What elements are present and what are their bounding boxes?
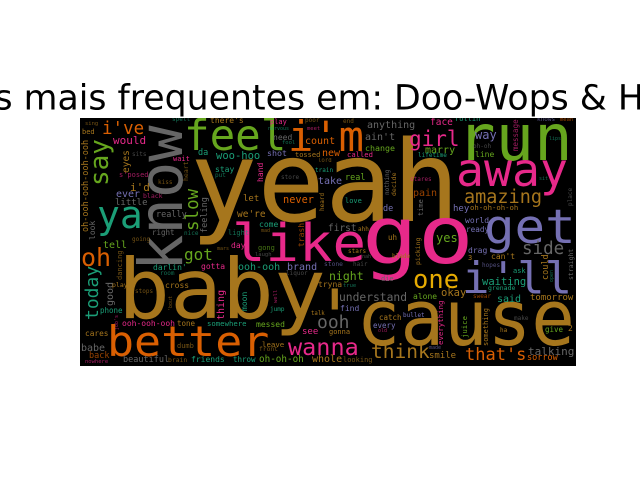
small words: night xyxy=(329,269,364,283)
word: 'cause: 'cause xyxy=(313,273,575,364)
small words: heard xyxy=(319,193,326,211)
small words: front xyxy=(259,346,278,353)
small words: bullet xyxy=(403,312,425,319)
small words: ooh-ooh xyxy=(238,262,280,273)
word: girl: girl xyxy=(409,127,460,151)
small words: bed xyxy=(82,128,95,136)
word: like: like xyxy=(232,213,366,274)
small words: place xyxy=(567,188,574,206)
small words: cross xyxy=(165,281,189,290)
small words: oh-oh xyxy=(473,143,491,150)
small words: heart xyxy=(182,161,190,181)
small words: tomorrow xyxy=(530,293,574,303)
word: baby: baby xyxy=(118,241,326,338)
small words: open xyxy=(549,270,555,282)
small words: tryna xyxy=(318,280,342,289)
small words: world xyxy=(465,216,489,225)
small words: back xyxy=(89,351,109,361)
small words: come xyxy=(259,220,278,229)
word: i'll: i'll xyxy=(462,252,572,304)
small words: beautiful xyxy=(123,355,169,365)
small words: drag xyxy=(468,246,487,255)
small words: s'posed xyxy=(119,171,149,179)
small words: marry xyxy=(425,145,455,156)
word: that's: that's xyxy=(465,345,526,365)
small words: tell xyxy=(103,240,127,251)
small words: change xyxy=(365,143,395,153)
panel: word cloud xyxy=(80,102,576,367)
small words: decide xyxy=(390,172,398,196)
small words: nice xyxy=(184,230,199,237)
word: think: think xyxy=(371,340,430,363)
small words: make xyxy=(514,315,529,322)
word: away: away xyxy=(456,143,568,197)
word: say: say xyxy=(85,139,115,186)
small words: stares xyxy=(410,176,432,183)
small words: da xyxy=(198,148,208,158)
word: get: get xyxy=(484,200,576,255)
word: feel: feel xyxy=(184,112,286,161)
small words: made xyxy=(429,345,441,351)
small words: light xyxy=(228,229,249,237)
small words: looking xyxy=(343,356,373,364)
small words: dancing xyxy=(116,250,124,280)
small words: 2 xyxy=(568,324,573,333)
small words: oh-oh-oh xyxy=(259,354,304,365)
small words: throw xyxy=(233,355,256,364)
small words: leave xyxy=(262,340,285,349)
word: better: better xyxy=(107,318,269,367)
small words: take xyxy=(318,176,342,187)
small words: give xyxy=(545,325,564,334)
small words: mars xyxy=(217,246,229,252)
small words: somewhere xyxy=(207,319,247,328)
small words: play xyxy=(270,118,287,126)
small words: way xyxy=(475,128,497,142)
small words: waiting xyxy=(482,276,526,288)
small words: gong xyxy=(258,244,275,252)
small words: fool xyxy=(282,140,295,146)
small words xyxy=(81,115,575,365)
small words: good xyxy=(105,282,116,306)
small words: whole xyxy=(312,354,342,365)
small words: i'd xyxy=(130,181,150,194)
small words: sing xyxy=(85,121,98,127)
small words: love xyxy=(345,197,362,205)
small words: uh xyxy=(388,233,397,242)
small words: tone xyxy=(177,319,196,328)
small words: spell xyxy=(172,116,190,123)
small words: catch xyxy=(379,313,402,322)
small words: something xyxy=(482,308,490,346)
small words: kiss xyxy=(158,179,173,186)
small words: new xyxy=(322,148,341,159)
small words: 3 xyxy=(468,254,472,262)
small words: stops xyxy=(135,288,153,295)
small words: ready xyxy=(466,225,490,234)
small words: really xyxy=(156,210,187,220)
small words: nowhere xyxy=(85,359,108,365)
small words: lips xyxy=(549,136,561,142)
word: run: run xyxy=(457,102,573,176)
small words: sorrow xyxy=(527,353,559,363)
small words: called xyxy=(347,150,373,159)
small words: mad xyxy=(261,228,270,234)
word: one: one xyxy=(413,265,459,295)
small words: poor xyxy=(305,117,320,124)
small words: nervous xyxy=(268,126,289,132)
small words: eyes xyxy=(121,150,132,173)
small words: ha xyxy=(500,327,508,334)
small words: jump xyxy=(270,306,285,313)
word: side: side xyxy=(522,239,564,259)
small words: darlin' xyxy=(153,263,187,272)
small words: going xyxy=(132,236,150,243)
word: today: today xyxy=(82,266,103,320)
small words: true xyxy=(343,283,356,289)
small words: laugh xyxy=(255,252,272,258)
small words: anything xyxy=(367,120,415,131)
small words: room xyxy=(160,270,175,277)
small words: blade xyxy=(392,253,410,260)
small words: stone xyxy=(324,261,343,268)
small words: lifetime xyxy=(418,152,447,159)
small words: message xyxy=(511,119,520,151)
small words: hey xyxy=(453,204,470,214)
small words: talk xyxy=(311,311,325,317)
small words: stars xyxy=(348,248,366,255)
small words: messed xyxy=(256,320,285,329)
small words: oh-oh-oh-oh xyxy=(470,203,518,212)
small words: could xyxy=(541,254,551,280)
small words: alone xyxy=(413,292,437,301)
small words: see xyxy=(302,327,318,337)
word: wanna: wanna xyxy=(288,333,359,361)
small words: put xyxy=(215,172,226,179)
small words: count xyxy=(305,136,335,147)
word: slow: slow xyxy=(183,188,203,231)
small words: hand xyxy=(256,163,265,182)
small words: okay xyxy=(441,287,466,299)
small words: die xyxy=(381,275,394,283)
small words: trash xyxy=(297,223,306,247)
small words: every xyxy=(373,321,396,330)
word: i've: i've xyxy=(102,119,144,139)
small words: knows xyxy=(537,116,555,123)
small words: feeling xyxy=(200,197,210,233)
small words: smile xyxy=(429,351,456,361)
small words: cares xyxy=(85,329,108,338)
small words: well xyxy=(273,290,279,303)
word: i'm: i'm xyxy=(288,112,364,161)
small words: right xyxy=(152,228,175,237)
small words: face xyxy=(430,117,453,128)
small words: we're xyxy=(237,209,266,220)
word: ooh: ooh xyxy=(317,312,350,333)
small words: job's xyxy=(114,315,120,330)
small words: pain xyxy=(413,188,437,199)
small words: grenade xyxy=(488,284,515,292)
small words: straight xyxy=(567,249,575,280)
small words: gotta xyxy=(201,262,225,271)
small words: store xyxy=(281,174,299,181)
small words: ooh-ooh-ooh xyxy=(122,319,175,328)
small words: oh-ooh-ooh-ooh-ooh xyxy=(81,140,91,232)
small words: find xyxy=(340,304,359,313)
small words: 'bout xyxy=(168,296,174,311)
small words: wait xyxy=(173,155,190,163)
small words: sits xyxy=(132,151,147,158)
small words: tossed xyxy=(295,151,320,159)
small words: friends xyxy=(191,355,225,364)
small words: yes xyxy=(436,231,458,245)
small words: shot xyxy=(267,148,287,158)
small words: gonna xyxy=(329,328,350,336)
word: yeah: yeah xyxy=(190,118,460,248)
small words: ever xyxy=(116,189,140,200)
small words: end xyxy=(343,118,354,125)
small words: mean xyxy=(560,117,573,123)
small words: brain xyxy=(168,356,187,364)
small words: juice xyxy=(460,316,469,338)
small words: hair xyxy=(353,261,368,268)
small words: stay xyxy=(215,165,234,174)
small words: first xyxy=(328,223,357,234)
word: oh: oh xyxy=(81,243,111,272)
small words: day xyxy=(231,241,246,250)
word: got: got xyxy=(184,245,213,264)
small words: swear xyxy=(473,293,491,300)
small words: brand xyxy=(287,262,317,273)
small words: ahh xyxy=(358,226,369,233)
small words: babe xyxy=(81,343,105,354)
small words: need xyxy=(273,133,292,142)
small words: everything xyxy=(436,300,445,345)
small words: sit xyxy=(539,176,548,182)
word: ya: ya xyxy=(97,193,143,237)
word: amazing: amazing xyxy=(464,187,542,208)
small words: de xyxy=(383,204,393,214)
small words: ask xyxy=(513,267,526,275)
words xyxy=(81,102,576,367)
small words: can't xyxy=(491,252,515,261)
small words: talking xyxy=(528,345,574,358)
small words: lord xyxy=(318,158,332,164)
small words: hopes xyxy=(482,262,500,269)
small words: look xyxy=(88,221,97,240)
small words: old xyxy=(378,328,387,334)
small words: would xyxy=(113,134,146,147)
small words: liquor xyxy=(286,270,308,277)
small words: line xyxy=(475,150,494,159)
small words: thing xyxy=(216,290,227,320)
small words: dumb xyxy=(177,342,194,350)
small words: picking xyxy=(414,238,422,265)
small words: rollin' xyxy=(455,115,485,123)
small words: little xyxy=(115,198,148,208)
small words: woo-hoo xyxy=(216,150,260,162)
word: know: know xyxy=(127,125,197,271)
small words: real xyxy=(345,173,365,183)
small words: train xyxy=(315,167,333,174)
small words: time xyxy=(417,199,425,216)
small words: ain't xyxy=(365,132,395,143)
small words: never xyxy=(283,194,314,206)
small words: black xyxy=(143,192,163,200)
small words: nah xyxy=(362,254,371,260)
small words: moon xyxy=(240,292,249,311)
small words: phone xyxy=(100,306,123,315)
word: go: go xyxy=(362,190,474,282)
small words: there's xyxy=(210,116,244,125)
small words: understand xyxy=(339,291,407,304)
small words: let xyxy=(243,194,259,204)
small words: play xyxy=(112,281,128,289)
small words: meet xyxy=(307,126,320,132)
small words: nothing xyxy=(384,169,391,195)
small words: said xyxy=(497,294,521,305)
